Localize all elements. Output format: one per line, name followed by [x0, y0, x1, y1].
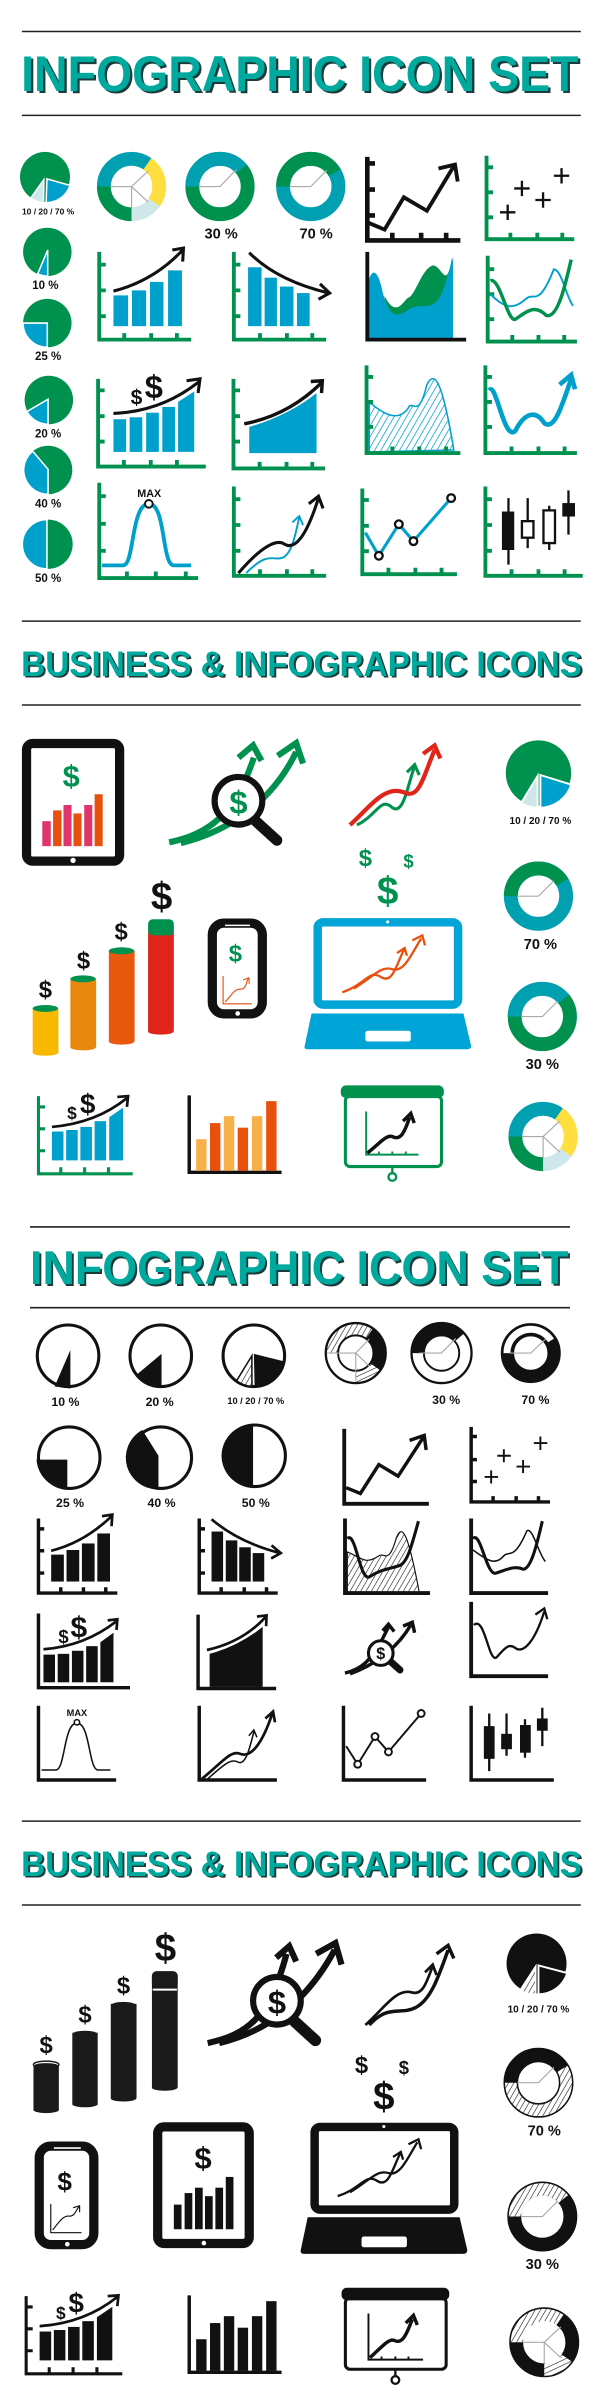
magnifier with green arrows: $: [229, 783, 248, 820]
black donut 30%: [508, 2182, 577, 2273]
donut multi right: [505, 1098, 582, 1175]
pie 50%: 50 %: [35, 573, 61, 585]
title black set: INFOGRAPHIC ICON SET: [30, 1242, 568, 1295]
pie 10%: 10 %: [32, 280, 59, 292]
point line chart: [362, 488, 457, 574]
black cylinders: $: [117, 1972, 130, 1999]
laptop: $: [403, 850, 414, 871]
max bell chart: [99, 483, 198, 578]
pie 10%: [23, 228, 72, 292]
line chart black: [367, 157, 460, 240]
smartphone: [212, 923, 262, 1016]
black double arrow chart: [199, 1706, 277, 1780]
cylinders with dollars: $: [151, 876, 172, 919]
area chart: [367, 252, 466, 340]
black candlestick chart: [471, 1706, 554, 1780]
donut 30% right: [515, 989, 570, 1073]
black laptop: $: [373, 2076, 395, 2119]
black wavy lines chart: [471, 1518, 548, 1593]
outline donut 70%: 70 %: [521, 1393, 549, 1407]
dollar bar chart: $: [131, 387, 143, 410]
title business: BUSINESS & INFOGRAPHIC ICONS: [21, 645, 582, 684]
outline pie 25%: [37, 1427, 100, 1510]
pie 10/20/70 right: [506, 740, 571, 827]
donut 30%: 30 %: [204, 226, 238, 242]
pie 25%: 25 %: [35, 351, 61, 363]
growth area chart: [233, 379, 325, 468]
presentation board: [341, 1085, 444, 1181]
outline donut 70%: [507, 1329, 555, 1407]
black area growth chart: [198, 1615, 276, 1688]
donut 30%: [192, 159, 248, 242]
title business black: BUSINESS & INFOGRAPHIC ICONS: [21, 1845, 582, 1884]
laptop: [304, 845, 471, 1049]
pie 40%: 40 %: [35, 499, 61, 511]
dollar bar chart small: [38, 1088, 133, 1174]
pie 50%: [22, 520, 73, 585]
tablet with bars: $: [63, 759, 80, 794]
black bar chart down: [199, 1518, 281, 1593]
orange bar chart: [189, 1095, 282, 1172]
black donut multi: [506, 2304, 583, 2381]
panel: color business icons: [21, 620, 584, 1182]
outline pie 50%: 50 %: [242, 1496, 270, 1510]
black hatched area chart: [345, 1518, 430, 1593]
donut 70%: [283, 159, 338, 242]
red green trend arrows: [350, 745, 440, 825]
pie 10/20/70: 10 / 20 / 70 %: [22, 207, 75, 217]
bar chart down: [234, 252, 330, 340]
smartphone: $: [229, 941, 242, 968]
black donut 70%: [504, 2048, 573, 2139]
magnifier with green arrows: [169, 743, 303, 843]
black cylinders: [33, 1927, 178, 2113]
black dollar bar chart: $: [71, 1611, 88, 1644]
black point line chart: [343, 1706, 426, 1780]
wave arrow chart: [485, 365, 577, 453]
wavy lines chart: [488, 256, 577, 342]
outline donut multi: [323, 1320, 389, 1386]
outline pie 10%: 10 %: [51, 1395, 79, 1409]
black line chart: [344, 1429, 429, 1504]
outline pie 10/20/70: 10 / 20 / 70 %: [227, 1396, 284, 1406]
donut 70% right: [511, 868, 566, 953]
donut 70%: 70 %: [299, 226, 333, 242]
black scatter chart: [471, 1427, 550, 1502]
double arrow curve chart: [234, 487, 326, 576]
black pie 10/20/70: [507, 1933, 569, 2016]
black max chart: [38, 1706, 116, 1780]
black pie 10/20/70: 10 / 20 / 70 %: [508, 2005, 569, 2016]
candlestick chart: [485, 487, 583, 576]
pie 25%: [23, 299, 72, 363]
panel: black infographic icon set: [30, 1226, 570, 1782]
max bell chart: MAX: [137, 488, 162, 500]
hatched area chart: [367, 365, 460, 453]
black tablet: [158, 2127, 249, 2245]
black cylinders: $: [40, 2032, 53, 2059]
outline pie 10%: [37, 1325, 99, 1409]
title black set: INFOGRAPHIC ICON SET: [32, 1244, 570, 1297]
black smartphone: $: [57, 2166, 72, 2196]
tablet with bars: [27, 743, 120, 863]
cylinders with dollars: $: [39, 976, 52, 1003]
pie 10/20/70 right: 10 / 20 / 70 %: [510, 816, 571, 827]
outline pie 50%: [222, 1424, 285, 1510]
black cylinders: $: [78, 2001, 92, 2028]
outline donut 30%: [412, 1323, 472, 1407]
pie 10/20/70: [20, 152, 75, 217]
outline pie 40%: [126, 1427, 192, 1510]
outline pie 20%: [130, 1325, 192, 1409]
dollar bar chart: [98, 368, 206, 467]
cylinders with dollars: $: [115, 919, 128, 946]
black smartphone: [39, 2146, 94, 2247]
pie 20%: 20 %: [35, 429, 61, 441]
black donut 70%: 70 %: [528, 2123, 561, 2139]
laptop: $: [359, 845, 372, 872]
black dollar bar chart: [38, 1611, 130, 1688]
black laptop: [301, 2052, 467, 2254]
outline donut 30%: 30 %: [432, 1393, 460, 1407]
black tablet: $: [195, 2140, 212, 2175]
outline pie 20%: 20 %: [146, 1395, 174, 1409]
black magnifier arrows: $: [376, 1645, 385, 1663]
dollar bar chart: $: [145, 368, 163, 405]
black donut 30%: 30 %: [526, 2257, 559, 2273]
dollar bar chart small: $: [67, 1103, 77, 1123]
cylinders with dollars: [33, 876, 174, 1056]
outline pie 40%: 40 %: [148, 1496, 176, 1510]
black dollar bar chart: $: [58, 1626, 69, 1647]
black laptop: $: [399, 2057, 409, 2078]
black bar chart up: [38, 1515, 117, 1593]
black dollar bar chart small: [26, 2287, 122, 2374]
cylinders with dollars: $: [77, 947, 90, 974]
dollar bar chart small: $: [80, 1088, 95, 1119]
black wave arrow chart: [471, 1602, 548, 1676]
black laptop: $: [355, 2052, 368, 2079]
laptop: $: [377, 870, 398, 913]
donut multi: [93, 148, 170, 225]
black magnifier arrows: $: [268, 1983, 286, 2020]
black dollar bar chart small: $: [56, 2303, 66, 2323]
donut 70% right: 70 %: [524, 937, 557, 953]
black cylinders: $: [155, 1927, 176, 1970]
bar chart up: [99, 248, 191, 340]
donut 30% right: 30 %: [526, 1057, 559, 1073]
panel: black business icons: [21, 1820, 584, 2385]
black magnifier arrows: [345, 1622, 415, 1674]
outline pie 25%: 25 %: [56, 1496, 84, 1510]
black trend arrows: [365, 1945, 454, 2025]
black presentation board: [342, 2288, 449, 2384]
black max chart: MAX: [67, 1708, 88, 1718]
black magnifier arrows: [208, 1943, 342, 2043]
black dollar bar chart small: $: [68, 2287, 84, 2318]
scatter chart: [487, 156, 574, 239]
pie 40%: [24, 446, 72, 511]
panel: color infographic icon set: [20, 30, 583, 585]
black bar chart: [189, 2295, 282, 2372]
pie 20%: [25, 376, 73, 441]
outline pie 10/20/70: [223, 1325, 285, 1406]
